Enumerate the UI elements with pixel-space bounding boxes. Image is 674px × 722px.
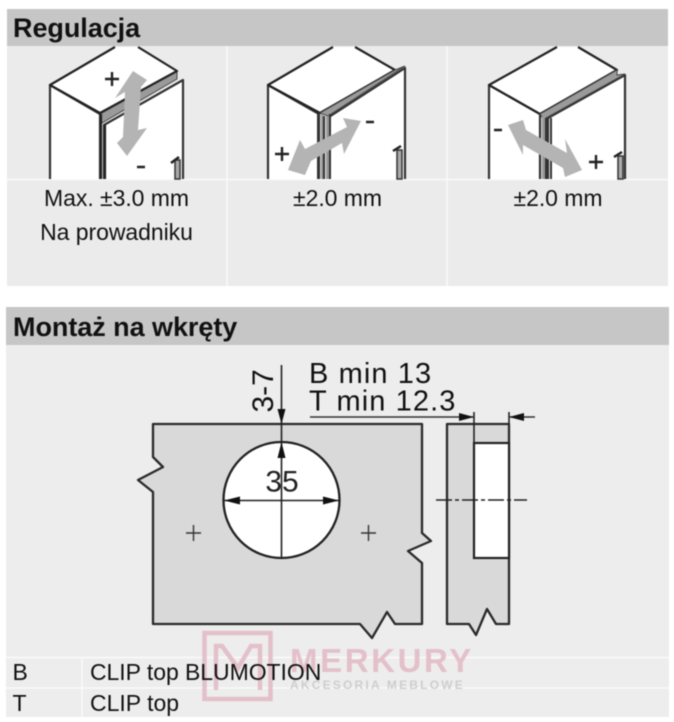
panel: montaz na wkrety: [6, 307, 669, 717]
illustration: vertical adjustment: [50, 47, 183, 179]
drawing: door side section: [436, 412, 527, 635]
dimension: edge distance arrows: [310, 413, 535, 421]
drawing: door front with cup hole: [138, 365, 431, 638]
heading: regulacja: [7, 9, 668, 46]
label: T min 12.3: T min 12.3: [309, 386, 456, 418]
panel: regulacja: [7, 9, 668, 286]
heading: montaz: Montaż na wkręty: [13, 312, 237, 342]
label: B min 13: B min 13: [309, 358, 432, 390]
label: depth range: ±2.0 mm: [293, 185, 382, 211]
heading: regulacja: Regulacja: [13, 13, 141, 43]
label: vertical range: [40, 185, 193, 245]
row: T: [12, 690, 179, 716]
row: B: CLIP top BLUMOTION: [90, 659, 321, 685]
label: vertical range: Max. ±3.0 mm: [44, 185, 189, 211]
illustration: side adjustment: [489, 47, 625, 179]
table: hinge types: [12, 659, 321, 716]
label: vertical range: Na prowadniku: [40, 219, 193, 245]
row: T: CLIP top: [90, 690, 179, 716]
row: B: B: [12, 659, 28, 685]
watermark: merkury logo: MERKURY: [290, 642, 474, 679]
watermark: merkury logo: [204, 633, 474, 699]
watermark: merkury logo: AKCESORIA MEBLOWE: [290, 678, 465, 692]
label: side range: ±2.0 mm: [514, 185, 602, 211]
illustration: depth adjustment: [268, 47, 405, 179]
label: 3-7: 3-7: [247, 369, 280, 412]
heading: montaz: [6, 307, 669, 345]
row: T: T: [12, 690, 27, 716]
dimension: cup diameter: 35: [265, 466, 299, 498]
